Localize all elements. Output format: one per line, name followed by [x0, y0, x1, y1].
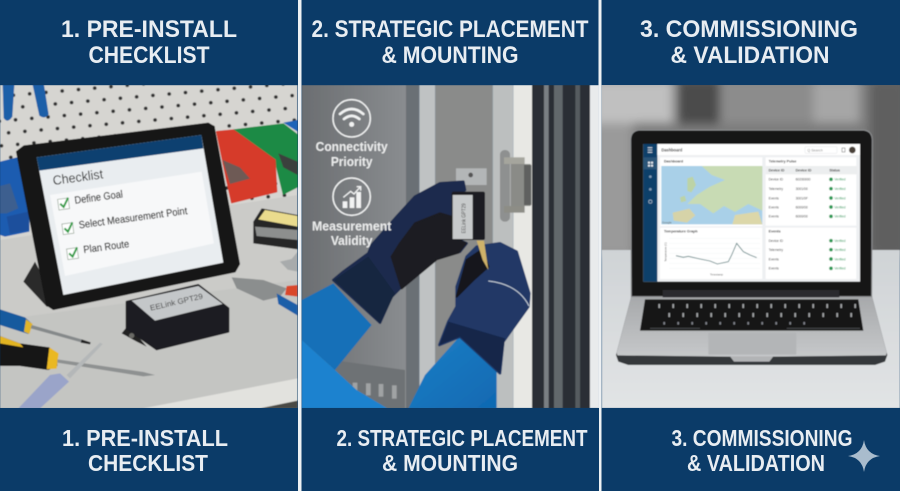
table card: telemetry: 6000/00 [796, 215, 808, 219]
panel: strategic placement door scene [302, 85, 599, 408]
text: mounted device label: EELink GPT29 [462, 203, 468, 233]
table card: telemetry: Verified [834, 215, 846, 219]
icon: green parts bin [233, 120, 298, 194]
checklist row: select measurement point [62, 206, 188, 235]
map card [660, 157, 762, 226]
table card: telemetry: 6000/00 [796, 205, 808, 209]
heading: strategic placement top: & MOUNTING [382, 42, 518, 69]
table card: events: Verified [834, 257, 846, 261]
panel dividers [298, 0, 602, 491]
icon: laptop base [616, 295, 887, 365]
table card: telemetry: Verified [834, 205, 846, 209]
table card: telemetry [766, 157, 857, 226]
panel: header 1 [0, 0, 298, 85]
chart card: temperature graph: Temperature Graph [664, 230, 698, 234]
icon: wrench [280, 252, 298, 272]
table card: telemetry: Verified [834, 178, 846, 182]
heading: commissioning bottom: & VALIDATION [687, 450, 825, 476]
icon: right blue sleeve [408, 336, 497, 408]
label: measurement validity: Validity [331, 233, 373, 248]
heading: commissioning top: & VALIDATION [670, 42, 830, 69]
heading: pre-install bottom: 1. PRE-INSTALL [62, 425, 228, 451]
table card: telemetry: 3001/00 [796, 187, 808, 191]
table card: telemetry: Events [769, 215, 779, 219]
label: measurement validity: Measurement [312, 218, 392, 233]
icon: user avatar [842, 147, 856, 153]
checklist row: select measurement point: Select Measurement Point [78, 206, 188, 231]
panel: footer 1 [0, 408, 298, 491]
icon: hanging blue pliers [3, 85, 49, 121]
panel: header 3 [602, 0, 900, 85]
table card: telemetry: Device ID [796, 168, 812, 172]
icon: yellow screwdriver [0, 336, 155, 376]
panel: footer 2 [302, 408, 599, 491]
icon: tablet stand [23, 262, 48, 308]
table card: telemetry: Events [769, 196, 779, 200]
table card: telemetry: Verified [834, 196, 846, 200]
text: checklist title: Checklist [52, 166, 104, 188]
heading: pre-install top: CHECKLIST [88, 42, 210, 69]
icon: pliers [232, 277, 298, 316]
chart card: temperature graph: Timestamp [710, 272, 724, 276]
table card: events: Verified [834, 267, 846, 271]
icon: measurement growth chart circle [333, 178, 370, 215]
checklist row: define goal [57, 189, 124, 210]
panel: pre-install workbench scene [0, 85, 298, 408]
icon: keyboard [640, 299, 863, 331]
icon: mounting bracket [456, 168, 487, 185]
table card: telemetry: Telemetry [769, 187, 783, 191]
table card: events: Events [769, 257, 779, 261]
icon: left blue sleeve [302, 283, 387, 408]
search box [805, 147, 837, 153]
table card: telemetry: 3001/0F [796, 196, 808, 200]
label: connectivity priority: Connectivity [316, 139, 388, 154]
panel: commissioning laptop scene [593, 80, 900, 408]
table card: events: Verified [834, 239, 846, 243]
checklist row: define goal: Define Goal [74, 189, 124, 207]
panel: header 2 [302, 0, 599, 85]
heading: commissioning top: 3. COMMISSIONING [640, 16, 858, 43]
icon: clear handled screwdriver [18, 343, 103, 408]
icon: blue screwdriver [0, 309, 91, 344]
icon: right glove [439, 241, 529, 373]
table card: events: Device ID [769, 239, 784, 243]
text: device label: EELink GPT29 [149, 292, 204, 313]
checklist row: plan route: Plan Route [83, 239, 130, 256]
icon: wifi connectivity circle [333, 100, 370, 137]
table card: telemetry: Events [769, 205, 779, 209]
heading: strategic placement top: 2. STRATEGIC PLACEMENT [312, 16, 589, 43]
table card: telemetry: Status [829, 168, 840, 172]
table card: events: Telemetry [769, 248, 783, 252]
chart card: temperature graph [660, 228, 762, 279]
heading: pre-install top: 1. PRE-INSTALL [61, 16, 237, 43]
heading: strategic placement bottom: & MOUNTING [382, 450, 518, 476]
icon: sparkle [848, 440, 880, 472]
icon: yellow tool case [253, 208, 298, 249]
table card: telemetry: 60200000 [796, 178, 811, 182]
table card: events: Verified [834, 248, 846, 252]
panel: footer 3 [602, 408, 900, 491]
label: connectivity priority: Priority [331, 154, 373, 169]
text: dashboard title: Dashboard [661, 148, 682, 154]
icon: red parts bin [217, 130, 277, 203]
heading: strategic placement bottom: 2. STRATEGIC PLACEMENT [336, 425, 588, 451]
table card: telemetry: Verified [834, 187, 846, 191]
table card: telemetry: Device ID [769, 168, 785, 172]
table card: events: Events [769, 230, 781, 234]
icon: blue parts bins [0, 157, 29, 237]
table card: telemetry: Telemetry Pulse [769, 160, 796, 164]
heading: pre-install bottom: CHECKLIST [88, 450, 208, 476]
table card: events: Events [769, 267, 779, 271]
icon: tracker in hand [452, 192, 485, 240]
search box: Q Search [807, 148, 823, 152]
table card: telemetry: Device ID [769, 178, 784, 182]
icon: vent bracket [340, 362, 405, 408]
icon: tablet with checklist [17, 123, 239, 309]
table card: events [766, 228, 856, 279]
icon: tracker device [122, 285, 228, 349]
icon: left glove [333, 182, 467, 323]
checklist row: plan route [66, 239, 130, 260]
chart card: temperature graph: Temperature (C) [663, 242, 667, 262]
heading: commissioning bottom: 3. COMMISSIONING [672, 425, 852, 451]
icon: trackpad [708, 336, 796, 354]
icon: door hinge [500, 150, 531, 222]
map card: Dashboard [664, 160, 683, 164]
icon: sidebar navigation [643, 148, 657, 203]
icon: laptop lid [631, 130, 872, 297]
map card: Google [662, 220, 672, 224]
dashboard screen [643, 144, 860, 282]
